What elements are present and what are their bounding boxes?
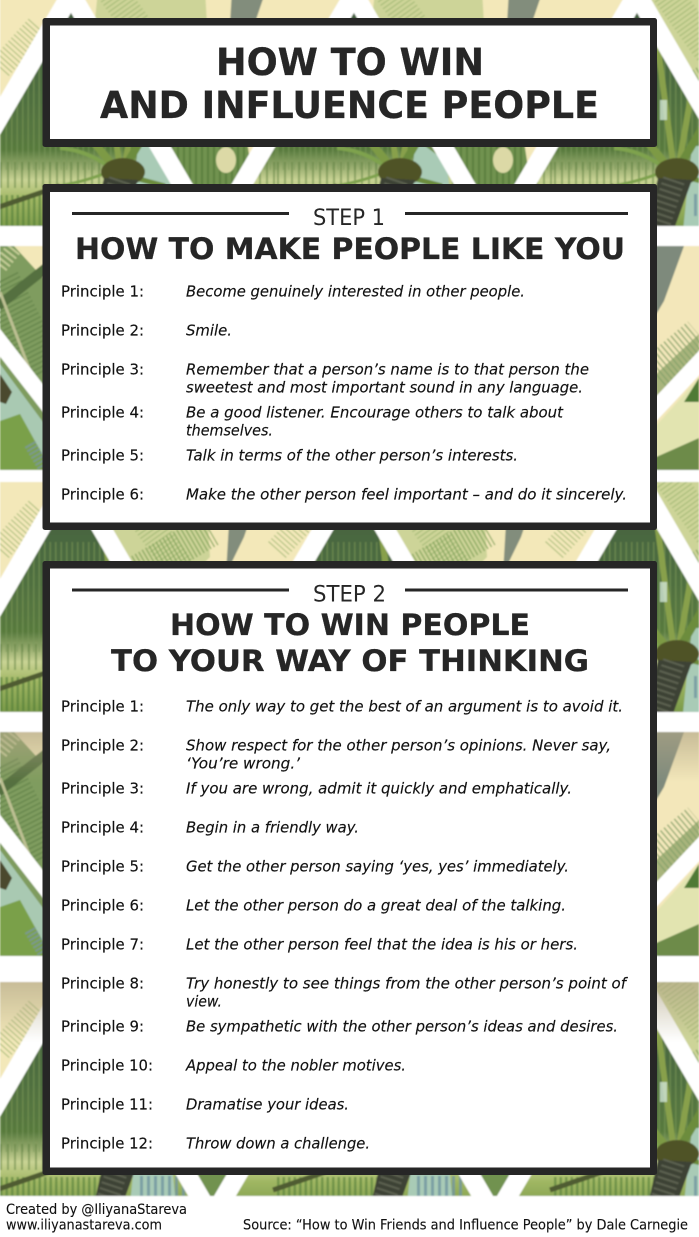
heading: main title: HOW TO WIN — [216, 41, 484, 84]
principle 1: The only way to get the best of an argument is to avoid it. — [186, 698, 623, 716]
principle 8: view. — [186, 992, 222, 1010]
panel: step 2 — [42, 561, 657, 1175]
principle 4: Begin in a friendly way. — [186, 818, 359, 836]
principle 2 — [61, 736, 611, 772]
principle 2: Principle 2: — [61, 322, 144, 340]
footer: creator credit: www.iliyanastareva.com — [6, 1218, 162, 1234]
principle 6: Principle 6: — [61, 896, 144, 914]
principle 10: Appeal to the nobler motives. — [185, 1056, 406, 1074]
principle 8 — [61, 974, 629, 1010]
step 1 label with rules — [72, 206, 628, 231]
principle 5: Principle 5: — [61, 858, 144, 876]
principle 6: Let the other person do a great deal of the talking. — [186, 896, 566, 914]
panel: title — [42, 18, 657, 147]
principle 3: If you are wrong, admit it quickly and emphatically. — [186, 780, 572, 798]
principle 3: Remember that a person’s name is to that person the — [186, 360, 589, 378]
principle 7: Let the other person feel that the idea is his or hers. — [186, 936, 578, 954]
step 2 label with rules: STEP 2 — [313, 582, 386, 608]
principle 5: Principle 5: — [61, 446, 144, 464]
principle 7: Principle 7: — [61, 936, 144, 954]
heading: how to make people like you: HOW TO MAKE PEOPLE LIKE YOU — [75, 232, 625, 266]
heading: how to win people to your way of thinking — [111, 608, 589, 678]
footer: creator credit: Created by @IliyanaStareva — [6, 1202, 187, 1218]
principle 10 — [61, 1056, 406, 1074]
step 2 label with rules — [72, 582, 628, 608]
principle 2 — [61, 322, 232, 340]
heading: main title — [100, 41, 599, 127]
principle 3 — [61, 360, 589, 396]
heading: how to win people to your way of thinking: HOW TO WIN PEOPLE — [170, 608, 530, 642]
principle 3: Principle 3: — [61, 360, 144, 378]
principle 4: Be a good listener. Encourage others to talk about — [186, 404, 564, 422]
principle 12: Principle 12: — [61, 1134, 153, 1152]
principle 8: Try honestly to see things from the other person’s point of — [186, 974, 629, 992]
step 1 label with rules: STEP 1 — [313, 206, 385, 231]
principle 2: Smile. — [186, 322, 232, 340]
principle 3: sweetest and most important sound in any language. — [186, 378, 583, 396]
principle 8: Principle 8: — [61, 974, 144, 992]
principle 1: Principle 1: — [61, 282, 144, 300]
heading: how to win people to your way of thinking: TO YOUR WAY OF THINKING — [111, 644, 589, 678]
heading: main title: AND INFLUENCE PEOPLE — [100, 84, 599, 127]
footer: creator credit — [6, 1202, 187, 1234]
principle 4: themselves. — [186, 422, 273, 440]
principle 1: Principle 1: — [61, 698, 144, 716]
principle 3: Principle 3: — [61, 780, 144, 798]
principle 11: Dramatise your ideas. — [186, 1096, 349, 1114]
principle 2: ‘You’re wrong.’ — [186, 754, 300, 772]
principle 4: Principle 4: — [61, 818, 144, 836]
principle 1: Become genuinely interested in other people. — [186, 282, 525, 300]
principle 2: Show respect for the other person’s opinions. Never say, — [186, 736, 611, 754]
principle 5: Talk in terms of the other person’s interests. — [186, 446, 518, 464]
principle 4 — [61, 818, 359, 836]
principle 5: Get the other person saying ‘yes, yes’ immediately. — [186, 858, 569, 876]
principle 4 — [61, 404, 564, 440]
principle 11 — [61, 1096, 349, 1114]
principle 4: Principle 4: — [61, 404, 144, 422]
principle 10: Principle 10: — [61, 1056, 153, 1074]
principle 12 — [61, 1134, 370, 1152]
principle 12: Throw down a challenge. — [186, 1134, 370, 1152]
principle 11: Principle 11: — [61, 1096, 153, 1114]
principle 9: Principle 9: — [61, 1018, 144, 1036]
panel: step 1 — [42, 184, 657, 530]
principle 9: Be sympathetic with the other person’s ideas and desires. — [186, 1018, 618, 1036]
principle 6: Principle 6: — [61, 486, 144, 504]
principle 6: Make the other person feel important – and do it sincerely. — [186, 486, 627, 504]
principle 2: Principle 2: — [61, 736, 144, 754]
